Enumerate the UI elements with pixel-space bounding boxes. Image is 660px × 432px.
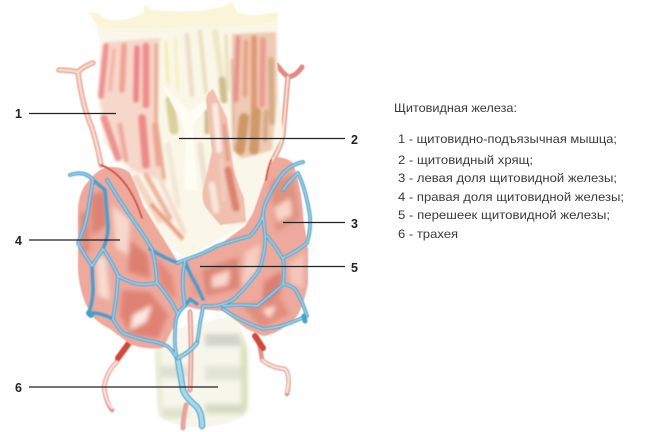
number labels on the diagram: 1 bbox=[15, 107, 22, 121]
legend bbox=[394, 101, 624, 241]
illustration: thyroid gland anatomy bbox=[59, 2, 310, 428]
number labels on the diagram: 2 bbox=[351, 133, 358, 147]
veins: light core bbox=[70, 162, 310, 359]
number labels on the diagram bbox=[15, 107, 358, 395]
muscle: right sternothyroid bbox=[232, 32, 277, 222]
arteries: upper and lower bbox=[59, 63, 302, 428]
pyramidal lobe bbox=[202, 89, 246, 225]
larynx cartilage and centre membrane bbox=[88, 2, 283, 258]
legend items: 2 - щитовидный хрящ; bbox=[398, 153, 533, 167]
number labels on the diagram: 6 bbox=[15, 381, 22, 395]
trachea vein trunk bbox=[89, 313, 305, 426]
muscle: left sternothyroid bbox=[100, 38, 184, 238]
number labels on the diagram: 4 bbox=[15, 234, 22, 248]
pointer lines bbox=[29, 114, 345, 387]
isthmus and right lobe, label 5 and 3 bbox=[178, 157, 308, 336]
legend items: 4 - правая доля щитовидной железы; bbox=[398, 190, 624, 204]
legend items: 6 - трахея bbox=[398, 227, 458, 241]
left lobe (viewer's left), label 4 bbox=[78, 167, 192, 348]
trachea bbox=[155, 316, 248, 428]
legend items: 3 - левая доля щитовидной железы; bbox=[398, 171, 617, 185]
legend items: 5 - перешеек щитовидной железы; bbox=[398, 208, 610, 222]
red vessels near gland bbox=[101, 160, 271, 218]
number labels on the diagram: 3 bbox=[351, 217, 358, 231]
legend heading: Щитовидная железа: bbox=[394, 101, 517, 115]
veins: dark outline bbox=[70, 162, 310, 359]
legend items bbox=[398, 132, 624, 241]
number labels on the diagram: 5 bbox=[351, 261, 358, 275]
legend items: 1 - щитовидно-подъязычная мышца; bbox=[398, 132, 617, 146]
